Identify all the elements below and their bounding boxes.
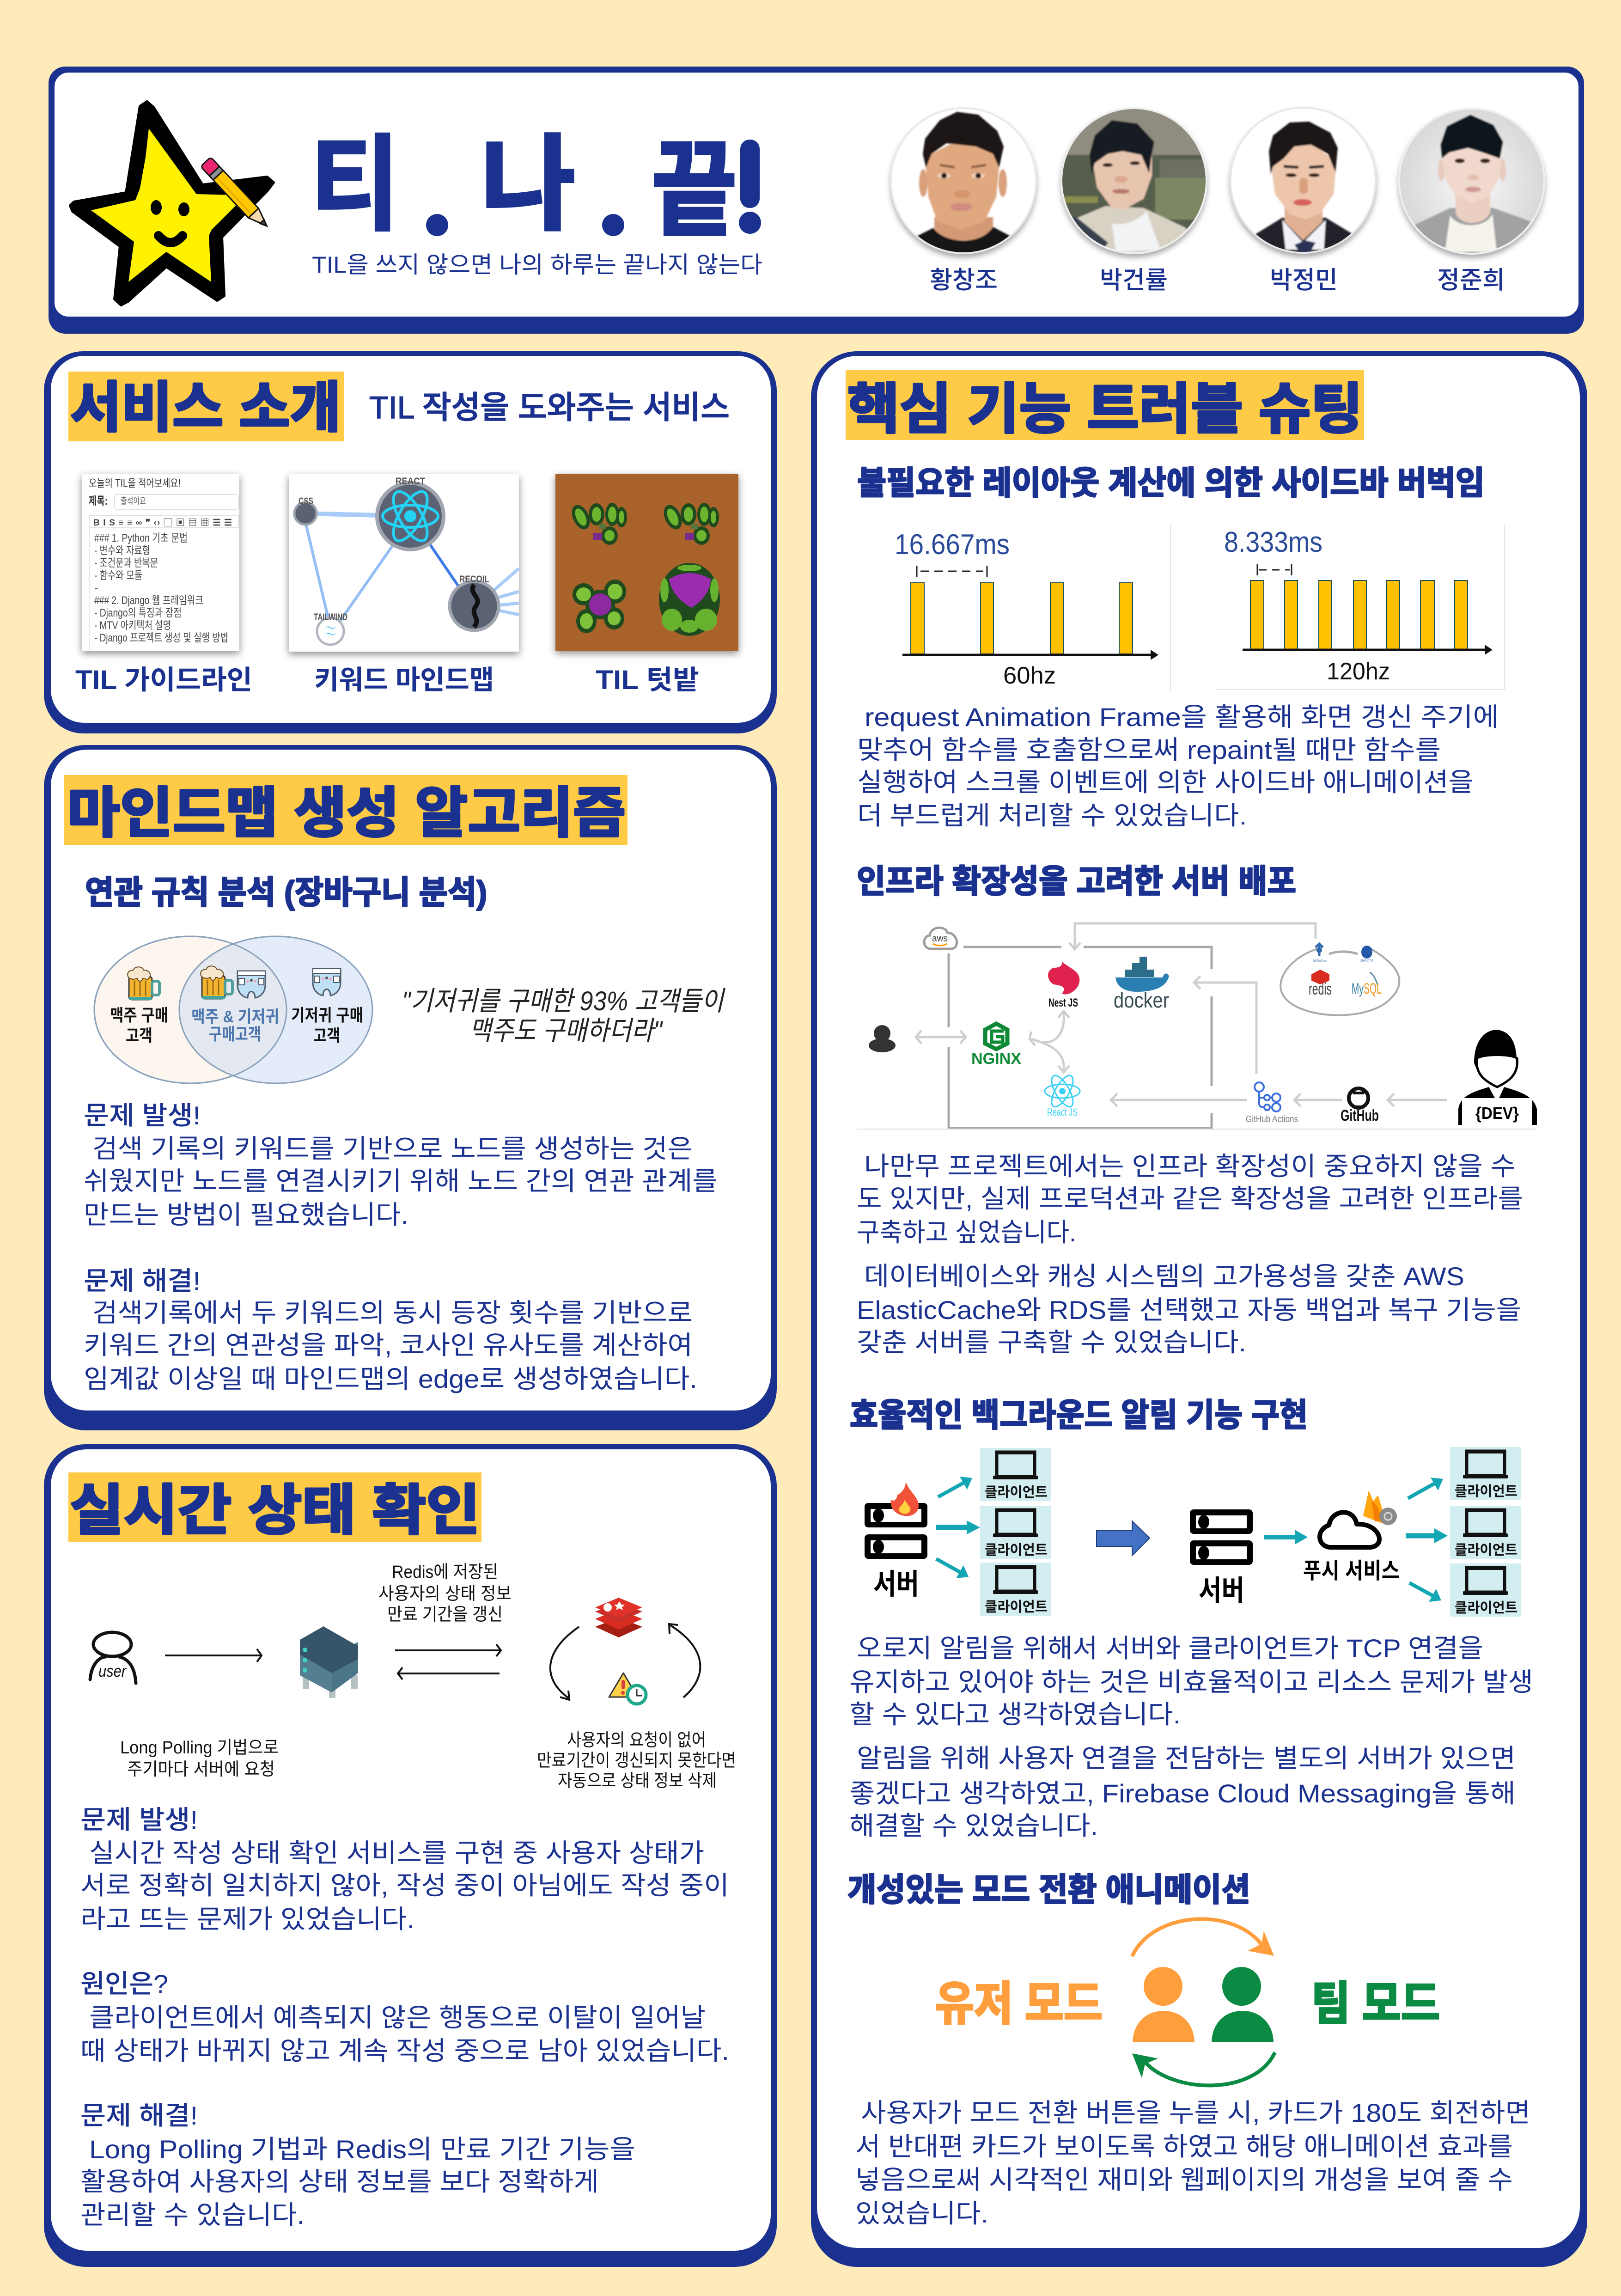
icon: push cloud firebase xyxy=(1303,1490,1400,1583)
heading: service intro: 서비스 소개 xyxy=(70,378,341,439)
plant sprout xyxy=(660,502,719,545)
icon: github actions xyxy=(1246,1082,1298,1124)
icon: user: user xyxy=(98,1661,127,1680)
icon: react: React JS xyxy=(1047,1106,1078,1118)
screenshot: keyword mind map xyxy=(289,474,519,652)
text: realtime problem, cause, solution: 문제 발생! xyxy=(80,1805,198,1834)
label: team mode: 팀 모드 xyxy=(1311,1978,1440,2030)
icon: nestjs xyxy=(1048,961,1079,1009)
screenshot: TIL guideline editor: - MTV 아키텍처 설명 xyxy=(94,619,171,632)
icon: github: GitHub xyxy=(1341,1107,1379,1124)
title xyxy=(311,127,761,249)
text: mode animation explanation xyxy=(855,2098,1530,2228)
label: long polling: 주기마다 서버에 요청 xyxy=(127,1760,275,1779)
heading: troubleshooting: 핵심 기능 트러블 슈팅 xyxy=(847,379,1363,440)
label: redis refresh: Redis에 저장된 xyxy=(392,1563,498,1582)
chart: refresh rate comparison xyxy=(895,524,1505,691)
client boxes, left: 클라이언트 xyxy=(985,1543,1048,1558)
text: problem and solution: 검색 기록의 키워드를 기반으로 노드를 생성하는 것은 xyxy=(92,1134,693,1163)
client boxes, left xyxy=(980,1448,1051,1616)
venn diagram: 고객 xyxy=(126,1026,152,1045)
service tagline: TIL 작성을 도와주는 서비스 xyxy=(369,390,730,425)
venn diagram: 맥주 구매 xyxy=(110,1006,168,1025)
panel: service intro xyxy=(44,351,777,733)
icon: react xyxy=(1045,1073,1080,1118)
icon: orange person xyxy=(1133,1967,1194,2042)
subheading: background notifications: 효율적인 백그라운드 알림 기능 구현 xyxy=(850,1397,1308,1433)
text: infra reasoning: 구축하고 싶었습니다. xyxy=(857,1218,1076,1247)
icon: nginx xyxy=(971,1024,1021,1068)
venn diagram: 구매고객 xyxy=(209,1025,261,1044)
text: requestAnimationFrame: request Animation Frame을 활용해 화면 갱신 주기에 xyxy=(865,702,1499,732)
subtitle: TIL을 쓰지 않으면 나의 하루는 끝나지 않는다 xyxy=(312,252,762,278)
text: problem and solution: 검색기록에서 두 키워드의 동시 등장 횟수를 기반으로 xyxy=(92,1298,693,1327)
client boxes, left: 클라이언트 xyxy=(985,1600,1048,1615)
chart: 60hz: 60hz xyxy=(1003,662,1056,689)
icon: star mascot with pencil xyxy=(70,102,274,305)
text: infra reasoning: 도 있지만, 실제 프로덕션과 같은 확장성을 고려한 인프라를 xyxy=(857,1184,1523,1213)
screenshot: keyword mind map: TAILWIND xyxy=(314,612,347,623)
screenshot: TIL guideline editor: - Django 프로젝트 생성 및 실행 방법 xyxy=(94,632,228,644)
heading: mind map algorithm: 마인드맵 생성 알고리즘 xyxy=(67,783,626,844)
screenshot: TIL guideline editor: 오늘의 TIL을 적어보세요! xyxy=(89,477,181,489)
text: realtime problem, cause, solution: Long Polling 기법과 Redis의 만료 기간 기능을 xyxy=(89,2135,635,2164)
label: long polling: Long Polling 기법으로 xyxy=(120,1738,279,1758)
subheading: sidebar jank: 불필요한 레이아웃 계산에 의한 사이드바 버벅임 xyxy=(857,465,1485,501)
text: realtime problem, cause, solution: 때 상태가 바뀌지 않고 계속 작성 중으로 남아 있었습니다. xyxy=(80,2036,729,2065)
arrows: push to clients xyxy=(1406,1478,1448,1602)
venn diagram: 고객 xyxy=(313,1026,340,1045)
text: requestAnimationFrame: 실행하여 스크롤 이벤트에 의한 사이드바 애니메이션을 xyxy=(857,768,1474,797)
captions: TIL 가이드라인 xyxy=(75,665,252,695)
icon: green person xyxy=(1212,1967,1274,2042)
text: realtime problem, cause, solution: 실시간 작성 상태 확인 서비스를 구현 중 사용자 상태가 xyxy=(89,1838,704,1868)
screenshot: TIL guideline editor: B I S ≡ ≡ ∞ ❞ ‹› ▢ ▣ ▤ ▦ ☰ ☰ xyxy=(93,518,232,528)
text: notifications reasoning xyxy=(849,1634,1533,1840)
screenshot: TIL guideline editor: 제목: xyxy=(89,495,108,507)
arrow: user to server xyxy=(165,1649,262,1662)
icon: github actions: GitHub Actions xyxy=(1246,1114,1298,1124)
icon: aws cloud xyxy=(924,928,957,949)
label: automatic deletion: 자동으로 상태 정보 삭제 xyxy=(558,1771,717,1791)
text: realtime problem, cause, solution: 서로 정확히 일치하지 않아, 작성 중이 아님에도 작성 중이 xyxy=(80,1871,729,1900)
text: infra reasoning: 갖춘 서버를 구축할 수 있었습니다. xyxy=(857,1328,1246,1357)
panel: realtime status xyxy=(44,1444,777,2267)
screenshot: TIL guideline editor: - xyxy=(94,582,98,594)
label: user mode: 유저 모드 xyxy=(935,1978,1103,2030)
icon: user xyxy=(869,1025,896,1052)
text: problem and solution: 임계값 이상일 때 마인드맵의 edge로 생성하였습니다. xyxy=(84,1364,697,1393)
team member names xyxy=(930,267,1505,294)
screenshot: keyword mind map: RECOIL xyxy=(459,574,489,585)
icon: redis xyxy=(595,1598,642,1637)
panel: mind map algorithm xyxy=(44,745,777,1430)
plant sprout xyxy=(568,502,627,545)
title: 나 xyxy=(481,127,575,243)
client boxes, right: 클라이언트 xyxy=(1455,1484,1517,1499)
icon: user xyxy=(90,1632,136,1683)
icon group: databases: AWS RDS xyxy=(1360,959,1373,963)
label: automatic deletion: 사용자의 요청이 없어 xyxy=(567,1731,706,1750)
text: requestAnimationFrame xyxy=(857,702,1499,830)
icon: developer xyxy=(1458,1030,1537,1127)
screenshot: TIL guideline editor: - Django의 특징과 장점 xyxy=(94,607,182,619)
chart: 120hz xyxy=(1224,526,1493,685)
text: realtime problem, cause, solution: 관리할 수 있습니다. xyxy=(80,2200,305,2229)
captions: 키워드 마인드맵 xyxy=(314,665,494,695)
icon: github xyxy=(1341,1088,1379,1124)
text: realtime problem, cause, solution: 활용하여 사용자의 상태 정보를 보다 정확하게 xyxy=(80,2167,599,2196)
client boxes, right xyxy=(1450,1447,1521,1617)
icon: docker xyxy=(1114,957,1169,1012)
text: mode animation explanation: 서 반대편 카드가 보이도록 하였고 해당 애니메이션 효과를 xyxy=(855,2132,1513,2161)
icon: expiry warning xyxy=(609,1673,646,1704)
arrows: server to push xyxy=(1264,1530,1308,1545)
text: infra reasoning: 데이터베이스와 캐싱 시스템의 고가용성을 갖춘 AWS xyxy=(864,1262,1464,1291)
client boxes, right: 클라이언트 xyxy=(1455,1600,1517,1616)
diagram: push notification xyxy=(865,1447,1521,1617)
text: problem and solution: 문제 해결! xyxy=(84,1266,201,1295)
icon: nginx: NGINX xyxy=(971,1050,1021,1068)
subheading: association rule: 연관 규칙 분석 (장바구니 분석) xyxy=(85,874,487,910)
icon: nestjs: Nest JS xyxy=(1048,996,1078,1009)
title: 끝 xyxy=(652,132,737,249)
text: notifications reasoning: 할 수 있다고 생각하였습니다. xyxy=(849,1700,1181,1729)
photo: 박건률 xyxy=(1058,104,1211,259)
text: problem and solution: 문제 발생! xyxy=(84,1101,201,1130)
screenshot: TIL guideline editor: - 함수와 모듈 xyxy=(94,569,142,582)
icon: server: 서버 xyxy=(1199,1575,1244,1607)
text: infra reasoning xyxy=(857,1152,1523,1357)
screenshot: TIL guideline editor: - 변수와 자료형 xyxy=(94,544,150,557)
plant flowering xyxy=(573,580,626,633)
arrows: redis cycle xyxy=(550,1624,700,1700)
label: automatic deletion xyxy=(537,1731,736,1791)
text: mode animation explanation: 있었습니다. xyxy=(855,2199,988,2228)
venn diagram: 맥주 & 기저귀 xyxy=(191,1007,279,1026)
text: realtime problem, cause, solution: 문제 해결! xyxy=(80,2101,198,2130)
chart: 120hz: 120hz xyxy=(1327,658,1390,685)
team member names: 박정민 xyxy=(1270,267,1338,294)
text: realtime problem, cause, solution xyxy=(80,1805,729,2229)
icon: server rack xyxy=(300,1626,358,1698)
arrows: server and redis xyxy=(395,1644,501,1679)
arrow: orange xyxy=(1132,1919,1274,1956)
screenshot: keyword mind map: REACT xyxy=(396,476,425,487)
screenshot: TIL guideline editor: - 조건문과 반복문 xyxy=(94,557,158,569)
icon group: databases: AWS ElastiCache xyxy=(1313,959,1327,963)
label: automatic deletion: 만료기간이 갱신되지 못한다면 xyxy=(537,1751,736,1771)
text: notifications reasoning: 알림을 위해 사용자 연결을 전담하는 별도의 서버가 있으면 xyxy=(857,1744,1516,1773)
photo: 황창조 xyxy=(890,108,1036,259)
text: notifications reasoning: 유지하고 있어야 하는 것은 비효율적이고 리소스 문제가 발생 xyxy=(849,1667,1533,1697)
chart: 120hz: 8.333ms xyxy=(1224,526,1322,558)
diagram: long polling flow xyxy=(90,1563,736,1791)
panel: header xyxy=(49,67,1584,334)
icon: developer: {DEV} xyxy=(1475,1104,1519,1123)
plant cabbage xyxy=(659,563,720,636)
text: infra reasoning: ElasticCache와 RDS를 선택했고 자동 백업과 복구 기능을 xyxy=(857,1295,1521,1325)
team member names: 정준희 xyxy=(1437,267,1505,294)
text: mode animation explanation: 사용자가 모드 전환 버튼을 누를 시, 카드가 180도 회전하면 xyxy=(861,2098,1530,2127)
screenshot: TIL guideline editor xyxy=(82,474,239,651)
text: notifications reasoning: 해결할 수 있었습니다. xyxy=(849,1811,1098,1840)
arrow: block transition xyxy=(1097,1521,1150,1556)
icon group: databases: MySQL xyxy=(1352,980,1382,997)
captions: TIL 텃밭 xyxy=(596,665,699,695)
panel: troubleshooting xyxy=(811,351,1587,2267)
text: problem and solution: 쉬웠지만 노드를 연결시키기 위해 노드 간의 연관 관계를 xyxy=(84,1166,718,1196)
chart: 60hz: 16.667ms xyxy=(895,529,1010,561)
screenshot: TIL guideline editor: 출석이요 xyxy=(121,496,146,507)
quote xyxy=(402,986,725,1046)
text: mode animation explanation: 넣음으로써 시각적인 재미와 웹페이지의 개성을 보여 줄 수 xyxy=(855,2165,1513,2194)
heading: realtime status: 실시간 상태 확인 xyxy=(70,1480,480,1541)
arrow: green xyxy=(1132,2052,1275,2085)
text: realtime problem, cause, solution: 클라이언트에서 예측되지 않은 행동으로 이탈이 일어날 xyxy=(89,2003,706,2032)
icon: server xyxy=(1190,1509,1253,1607)
team member names: 박건률 xyxy=(1100,267,1168,294)
icon: aws cloud: aws xyxy=(932,934,948,944)
text: notifications reasoning: 좋겠다고 생각하였고, Firebase Cloud Messaging을 통해 xyxy=(849,1779,1516,1808)
diagram: mode switch xyxy=(935,1919,1440,2085)
subheading: infra: 인프라 확장성을 고려한 서버 배포 xyxy=(857,863,1296,899)
text: realtime problem, cause, solution: 라고 뜨는 문제가 있었습니다. xyxy=(80,1905,414,1934)
subheading: mode animation: 개성있는 모드 전환 애니메이션 xyxy=(847,1872,1250,1908)
icon group: databases: redis xyxy=(1309,979,1332,998)
text: problem and solution: 만드는 방법이 필요했습니다. xyxy=(84,1200,408,1229)
icon group: databases xyxy=(1280,944,1399,1015)
photo: 정준희 xyxy=(1398,106,1546,259)
text: requestAnimationFrame: 맞추어 함수를 호출함으로써 repaint될 때만 함수를 xyxy=(857,735,1441,764)
title: 티 xyxy=(311,127,399,243)
icon: overloaded server xyxy=(865,1481,927,1600)
chart: 60hz xyxy=(895,529,1158,689)
text: realtime problem, cause, solution: 원인은? xyxy=(80,1969,168,1998)
screenshot: keyword mind map: CSS xyxy=(299,496,313,507)
photo: 박정민 xyxy=(1230,107,1376,259)
icon: docker: docker xyxy=(1114,988,1169,1012)
quote: 맥주도 구매하더라" xyxy=(469,1016,663,1046)
text: problem and solution xyxy=(84,1101,718,1393)
screenshot: TIL guideline editor: ### 1. Python 기초 문법 xyxy=(94,532,188,544)
label: long polling xyxy=(120,1738,279,1779)
arrows: server to clients xyxy=(936,1477,980,1578)
text: notifications reasoning: 오로지 알림을 위해서 서버와 클라이언트가 TCP 연결을 xyxy=(857,1634,1483,1663)
text: requestAnimationFrame: 더 부드럽게 처리할 수 있었습니다. xyxy=(857,801,1247,830)
text: infra reasoning: 나만무 프로젝트에서는 인프라 확장성이 중요하지 않을 수 xyxy=(864,1152,1516,1181)
icon: push cloud firebase: 푸시 서비스 xyxy=(1303,1559,1400,1583)
image: TIL garden xyxy=(555,474,738,651)
venn diagram: 기저귀 구매 xyxy=(291,1006,363,1025)
icon: overloaded server: 서버 xyxy=(873,1569,919,1600)
label: redis refresh: 만료 기간을 갱신 xyxy=(387,1605,503,1624)
client boxes, right: 클라이언트 xyxy=(1455,1543,1517,1558)
captions xyxy=(75,665,699,695)
text: problem and solution: 키워드 간의 연관성을 파악, 코사인 유사도를 계산하여 xyxy=(84,1331,693,1360)
screenshot: TIL guideline editor: ### 2. Django 웹 프레임워크 xyxy=(94,594,203,607)
venn diagram xyxy=(94,936,372,1083)
label: redis refresh: 사용자의 상태 정보 xyxy=(378,1584,512,1604)
team member names: 황창조 xyxy=(930,267,998,294)
diagram: infrastructure xyxy=(857,923,1537,1129)
quote: "기저귀를 구매한 93% 고객들이 xyxy=(402,986,725,1016)
label: redis refresh xyxy=(378,1563,512,1624)
client boxes, left: 클라이언트 xyxy=(985,1485,1048,1500)
